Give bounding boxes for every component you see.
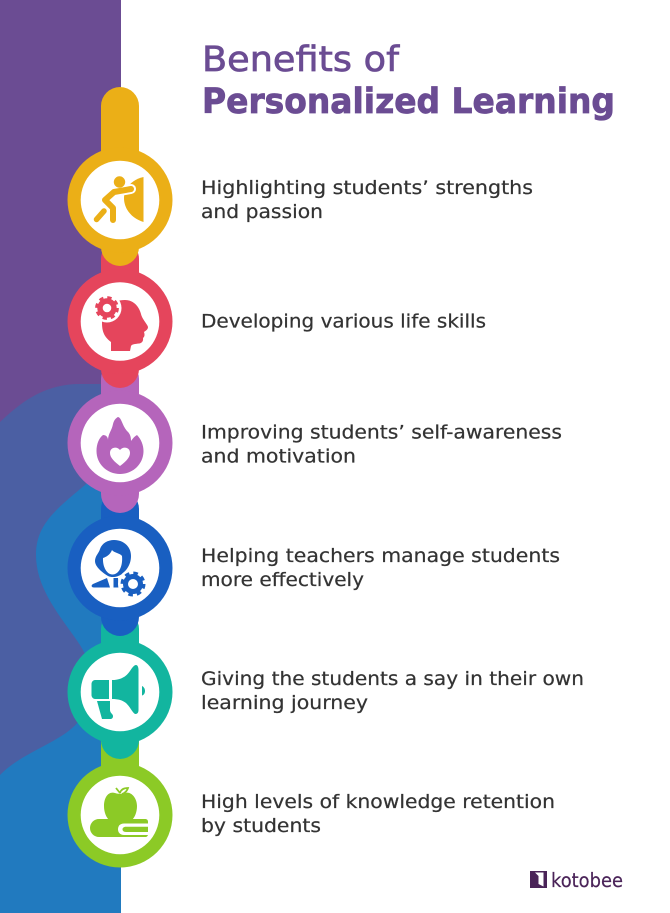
text block: strengths and passion: Highlighting students’ strengths <box>201 178 533 199</box>
icon: megaphone <box>92 665 145 719</box>
icon: apple on book <box>90 788 148 837</box>
text block: knowledge retention <box>201 792 555 837</box>
icon: person pushing shield <box>96 176 144 222</box>
text block: students' say: Giving the students a say in their own <box>201 669 584 690</box>
text block: teachers manage students: Helping teachers manage students <box>201 546 560 567</box>
text block: strengths and passion <box>201 178 533 223</box>
title: Personalized Learning <box>202 82 615 122</box>
background panel: layered purple and blue waves <box>0 0 121 913</box>
vertical timeline with connected pills and rings <box>68 87 172 868</box>
icon: woman with gear <box>92 540 148 599</box>
text block: students' say: learning journey <box>201 693 368 714</box>
text block: strengths and passion: and passion <box>201 202 323 223</box>
text block: self-awareness and motivation: Improving students’ self-awareness <box>201 422 562 444</box>
text block: self-awareness and motivation <box>201 422 562 468</box>
text block: life skills: Developing various life skills <box>201 312 486 332</box>
title <box>202 40 615 122</box>
text block: teachers manage students <box>201 546 560 591</box>
text block: self-awareness and motivation: and motivation <box>201 446 356 468</box>
text block: students' say <box>201 669 584 714</box>
text block: teachers manage students: more effectively <box>201 570 364 591</box>
logo: kotobee: kotobee <box>551 869 623 892</box>
icon: flame with heart <box>96 417 144 474</box>
text block: knowledge retention: by students <box>201 816 321 837</box>
icon: head with gear <box>92 294 148 351</box>
title: Benefits of <box>202 40 400 80</box>
text block: knowledge retention: High levels of knowledge retention <box>201 792 555 813</box>
